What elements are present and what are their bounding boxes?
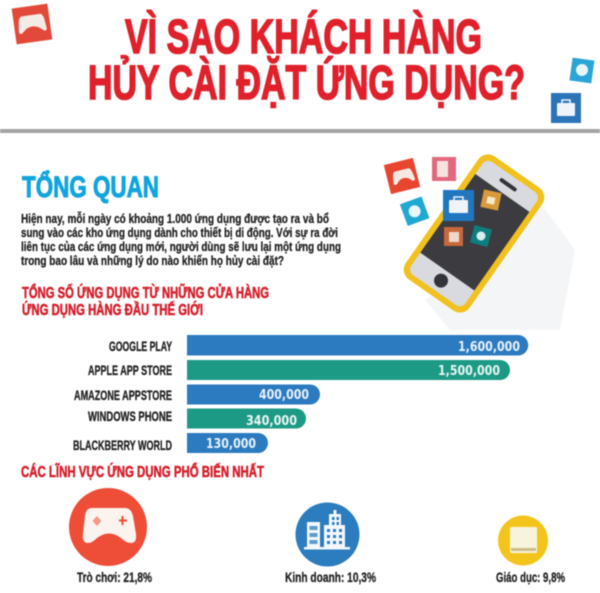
row: BlackBerry World (73, 433, 268, 453)
icon: game controller circle (69, 488, 147, 566)
label: games: Trò chơi: 21,8% (77, 569, 152, 585)
row: Apple App Store (88, 360, 510, 380)
heading: app store totals: ỨNG DỤNG HÀNG ĐẦU THẾ GIỚI (22, 300, 203, 319)
row: Amazone Appstore: AMAZONE APPSTORE (74, 387, 172, 403)
heading: app store totals: TỔNG SỐ ỨNG DỤNG TỪ NHỮNG CỬA HÀNG (22, 282, 269, 302)
intro paragraph: trong bao lâu và những lý do nào khiến họ hủy cài đặt? (21, 253, 284, 268)
icon: briefcase tile top right (551, 93, 581, 123)
row: Google Play: 1,600,000 (458, 340, 520, 355)
label: education: Giáo dục: 9,8% (496, 569, 565, 585)
icon: buildings circle (296, 502, 360, 566)
icon: game tile top left (12, 4, 52, 44)
app tile: pink (432, 157, 456, 181)
intro paragraph: liên tục của các ứng dụng mới, người dùng sẽ lưu lại một ứng dụng (21, 239, 341, 254)
row: Windows Phone: WINDOWS PHONE (88, 408, 172, 424)
category: business (285, 502, 376, 585)
icon: book circle (498, 516, 548, 566)
app tile: building (444, 227, 463, 246)
row: Windows Phone (88, 408, 306, 429)
heading: popular categories: CÁC LĨNH VỰC ỨNG DỤNG PHỔ BIẾN NHẤT (21, 461, 264, 481)
icon: chart tile top right (569, 58, 594, 83)
intro paragraph: sung vào các kho ứng dụng dành cho thiết bị di động. Với sự ra đời (21, 225, 338, 240)
row: Apple App Store: 1,500,000 (438, 364, 500, 379)
heading: overview: TỔNG QUAN (22, 170, 159, 204)
app tile: chart (400, 197, 429, 226)
row: Amazone Appstore: 400,000 (259, 388, 309, 403)
phone body (399, 150, 549, 317)
app tile: lock (480, 189, 502, 211)
label: business: Kinh doanh: 10,3% (285, 569, 376, 585)
intro paragraph: Hiện nay, mỗi ngày có khoảng 1.000 ứng dụng được tạo ra và bổ (21, 211, 329, 226)
row: Google Play (109, 335, 528, 356)
row: Amazone Appstore (74, 384, 320, 404)
heading: app store totals (22, 282, 269, 319)
row: BlackBerry World: 130,000 (206, 437, 256, 452)
app tile: teal (470, 225, 492, 247)
row: Apple App Store: APPLE APP STORE (88, 362, 172, 378)
bar chart: app stores (73, 335, 528, 453)
illustration: phone (384, 150, 575, 330)
header divider (0, 129, 600, 133)
row: BlackBerry World: BLACKBERRY WORLD (73, 437, 172, 453)
phone shadow (425, 205, 575, 330)
row: Windows Phone: 340,000 (246, 414, 297, 429)
title (88, 10, 525, 110)
row: Google Play: GOOGLE PLAY (109, 338, 172, 354)
category: education (496, 516, 565, 585)
category: games (69, 488, 152, 585)
app tile: game (384, 158, 420, 194)
app tile: briefcase (443, 190, 474, 221)
intro paragraph (21, 211, 341, 268)
